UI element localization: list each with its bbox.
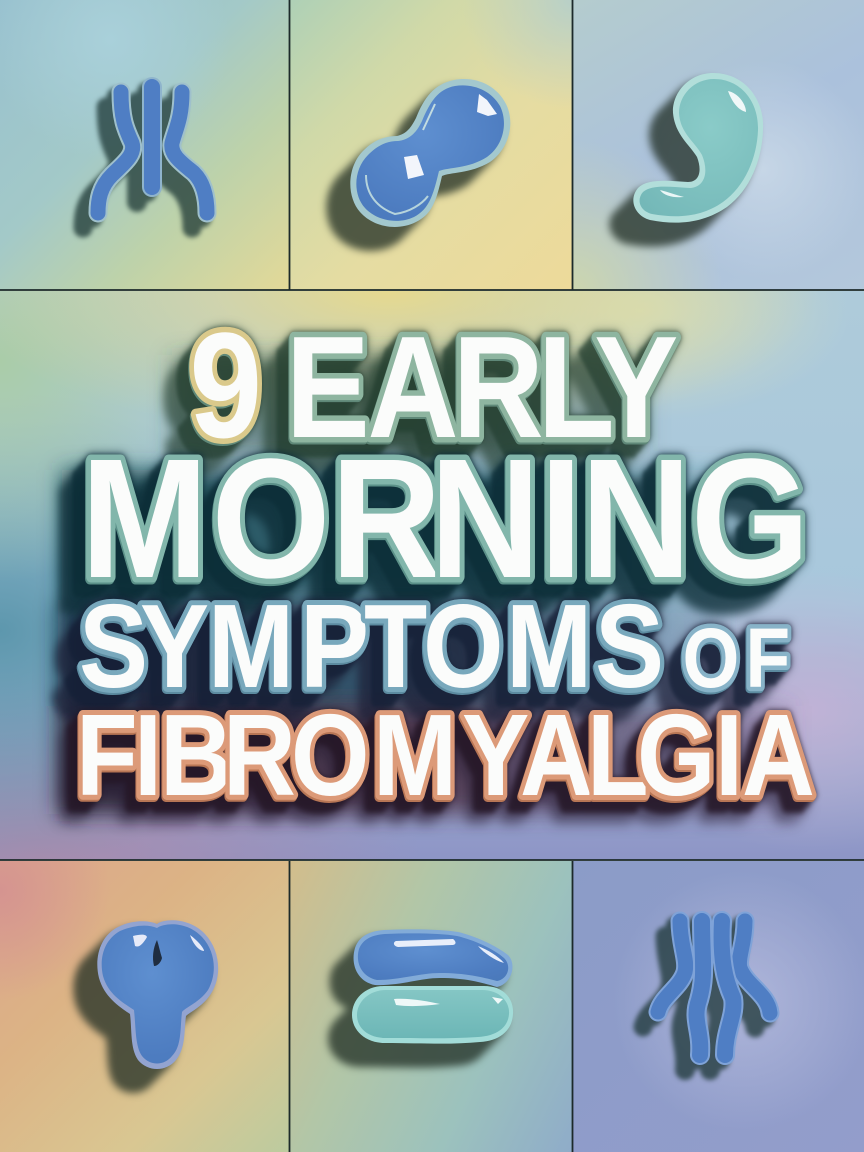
title line: FIBROMYALGIA: FIBROMYALGIA (76, 692, 815, 821)
icon: two stacked pills bottom middle (352, 929, 513, 1044)
title line: SYMPTOMS OF: SYMPTOMS (79, 579, 664, 713)
panel: top left (0, 0, 289, 290)
panel: top right (573, 0, 864, 290)
title (76, 301, 815, 821)
panel: bottom right (573, 861, 864, 1152)
panel: top middle (290, 0, 572, 290)
title line: SYMPTOMS OF: OF (683, 611, 790, 705)
blue pill (354, 929, 512, 987)
icon: four-strand protein bottom right (658, 921, 770, 1055)
title line: 9 EARLY: EARLY (286, 306, 678, 468)
icon: three-strand protein top left (98, 87, 207, 213)
panel: bottom middle (290, 861, 572, 1152)
panel: bottom left (0, 861, 289, 1152)
panel: central title background (0, 291, 864, 860)
teal pill (352, 986, 513, 1044)
icon: Y-shaped capsule bottom left (97, 920, 218, 1069)
title line: 9 EARLY: 9 (189, 301, 262, 469)
icon: comma-shaped capsule top right (633, 73, 763, 223)
title line: MORNING: MORNING (81, 425, 810, 614)
icon: peanut-shaped capsule top middle (350, 79, 510, 227)
title shadow backdrop (58, 355, 788, 814)
